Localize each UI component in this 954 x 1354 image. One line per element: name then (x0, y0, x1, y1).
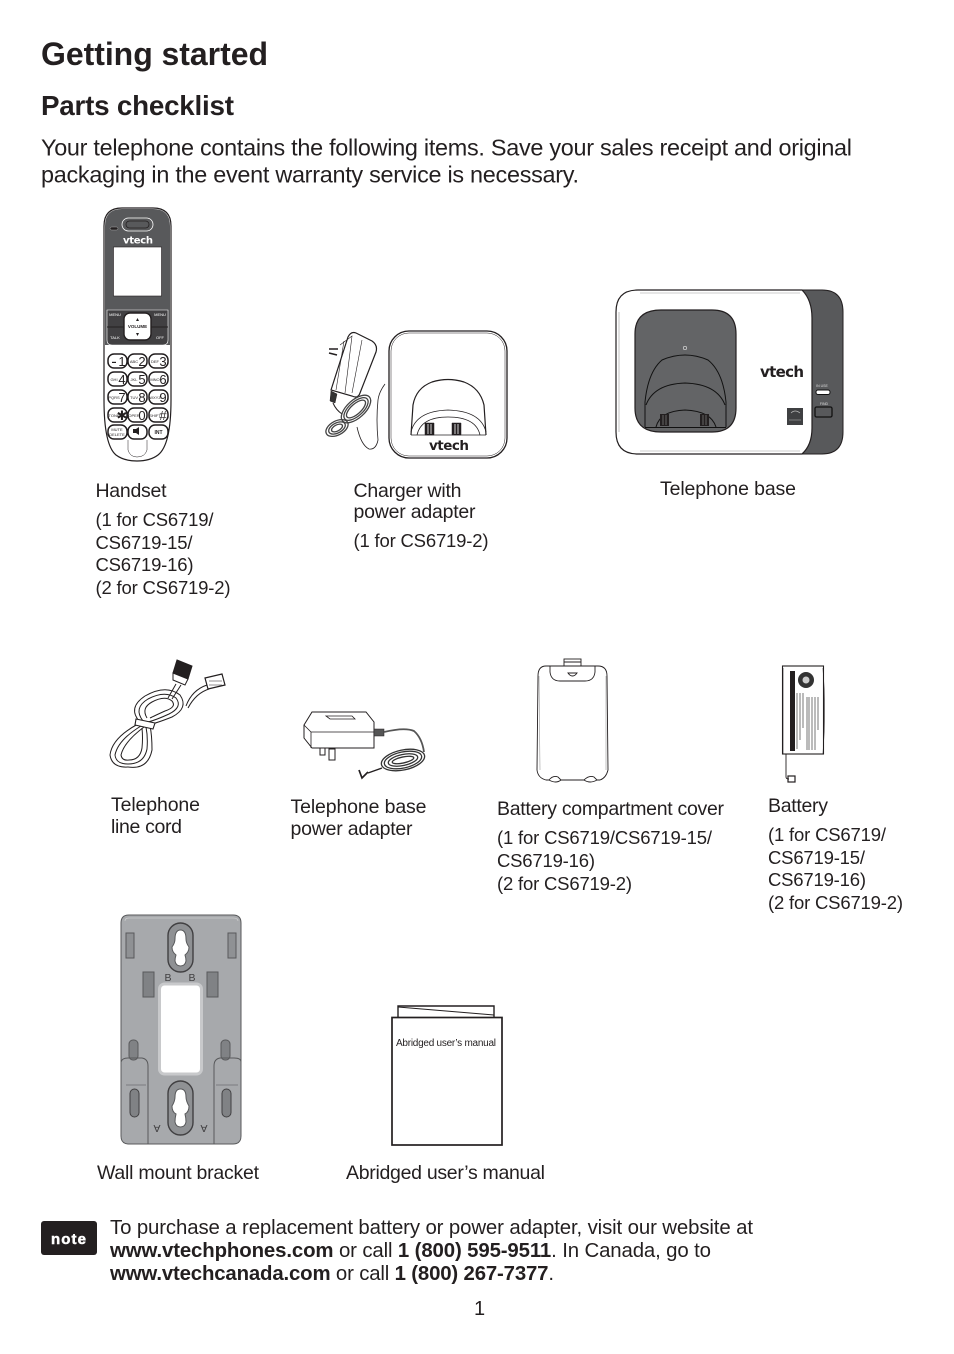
label: battery: CS6719-16) (768, 869, 866, 890)
label: handset: (1 for CS6719/ (96, 509, 214, 530)
icon: handset: TUV (130, 395, 138, 400)
label: battery: (1 for CS6719/ (768, 824, 887, 845)
label: handset: (2 for CS6719-2) (96, 577, 230, 598)
icon: wall mount bracket: B (188, 972, 196, 984)
label: battery compartment cover: CS6719-16) (497, 850, 595, 871)
label: handset: CS6719-16) (96, 554, 194, 575)
label: charger: Charger with (354, 480, 462, 502)
icon: wall mount bracket (121, 915, 241, 1144)
icon: note badge: note (51, 1231, 86, 1248)
page number: 1 (474, 1298, 485, 1320)
icon: telephone base power adapter (304, 712, 427, 778)
intro text (41, 134, 852, 188)
label: handset (96, 480, 230, 598)
icon: charger with power adapter (323, 331, 507, 458)
icon: handset: TONE (108, 413, 120, 418)
icon: telephone base: IN USE (816, 384, 828, 388)
label: charger (354, 480, 488, 551)
label: battery compartment cover: (1 for CS6719/CS6719-15/ (497, 827, 713, 848)
label: battery compartment cover (497, 798, 724, 894)
label: charger: power adapter (354, 501, 476, 523)
icon: handset: SHIFT (149, 413, 161, 418)
icon: wall mount bracket: B (164, 972, 172, 984)
label: telephone line cord (111, 794, 200, 838)
icon: handset: 5 (138, 372, 146, 387)
label: telephone base power adapter (290, 796, 426, 840)
icon: battery (782, 666, 824, 782)
icon: handset: OFF (156, 335, 165, 340)
icon: handset: JKL (131, 377, 138, 382)
label: battery compartment cover: (2 for CS6719-2) (497, 873, 632, 894)
icon: handset (104, 208, 171, 461)
logo: charger vtech: vtech (429, 438, 469, 454)
note text (109, 1217, 753, 1285)
note text: To purchase a replacement battery or power adapter, visit our website at (110, 1217, 753, 1239)
icon: abridged user's manual: Abridged user’s manual (396, 1038, 496, 1049)
icon: handset: ▬ (112, 359, 116, 364)
icon: telephone base (616, 290, 843, 454)
note text: www.vtechcanada.com or call 1 (800) 267-7377. (109, 1263, 554, 1285)
icon: handset: 3 (159, 354, 167, 369)
heading: parts checklist: Parts checklist (41, 90, 234, 121)
icon: handset: VOLUME (128, 324, 147, 329)
icon: handset: MNO (150, 377, 160, 382)
icon: wall mount bracket: A (200, 1122, 208, 1134)
icon: battery compartment cover (537, 659, 608, 782)
title: Getting started (41, 36, 268, 72)
intro text: packaging in the event warranty service is necessary. (41, 162, 579, 188)
icon: handset: GHI (110, 377, 118, 382)
icon: handset: TALK (110, 335, 120, 340)
icon: handset: WXYZ (149, 395, 161, 400)
icon: handset: ✱ (117, 408, 128, 423)
icon: handset: 0 (138, 408, 146, 423)
label: battery: (2 for CS6719-2) (768, 892, 903, 913)
icon: handset: 7 (118, 390, 126, 405)
icon: wall mount bracket: A (153, 1122, 161, 1134)
label: abridged user's manual: Abridged user’s manual (346, 1162, 545, 1184)
icon: handset: DEF (151, 359, 160, 364)
icon: telephone base: vtech (760, 363, 804, 381)
icon: handset: MENU (109, 312, 121, 317)
label: telephone base: Telephone base (660, 478, 796, 500)
icon: handset: MENU (154, 312, 166, 317)
label: battery: Battery (768, 795, 828, 817)
label: telephone line cord: line cord (111, 816, 182, 838)
icon: handset: 8 (138, 390, 146, 405)
label: handset: CS6719-15/ (96, 532, 193, 553)
icon: handset: DELETE (109, 432, 125, 437)
label: telephone line cord: Telephone (111, 794, 200, 816)
icon: note badge (41, 1221, 97, 1255)
label: telephone base power adapter: Telephone base (290, 796, 426, 818)
icon: handset: OPER (128, 413, 140, 418)
label: telephone base power adapter: power adapter (290, 818, 413, 840)
icon: telephone base: FIND (820, 402, 829, 406)
icon: handset: ABC (130, 359, 138, 364)
label: battery (768, 795, 903, 913)
icon: handset: vtech (123, 236, 153, 246)
icon: handset: 4 (118, 372, 126, 387)
icon: handset: 2 (138, 354, 146, 369)
note text: www.vtechphones.com or call 1 (800) 595-9511. In Canada, go to (109, 1240, 711, 1262)
icon: handset: # (159, 408, 167, 423)
label: battery compartment cover: Battery compartment cover (497, 798, 724, 820)
label: battery: CS6719-15/ (768, 847, 866, 868)
icon: handset: 9 (159, 390, 167, 405)
icon: handset: PQRS (108, 395, 120, 400)
icon: handset: 1 (118, 354, 126, 369)
icon: telephone line cord (110, 660, 225, 767)
label: handset: Handset (96, 480, 167, 502)
icon: handset: 6 (159, 372, 167, 387)
icon: abridged user's manual (392, 1006, 502, 1145)
label: charger: (1 for CS6719-2) (354, 530, 488, 551)
icon: handset: INT (154, 430, 163, 436)
intro text: Your telephone contains the following items. Save your sales receipt and original (41, 134, 852, 160)
icon: handset: MUTE (111, 427, 123, 432)
label: wall mount bracket: Wall mount bracket (97, 1162, 260, 1184)
